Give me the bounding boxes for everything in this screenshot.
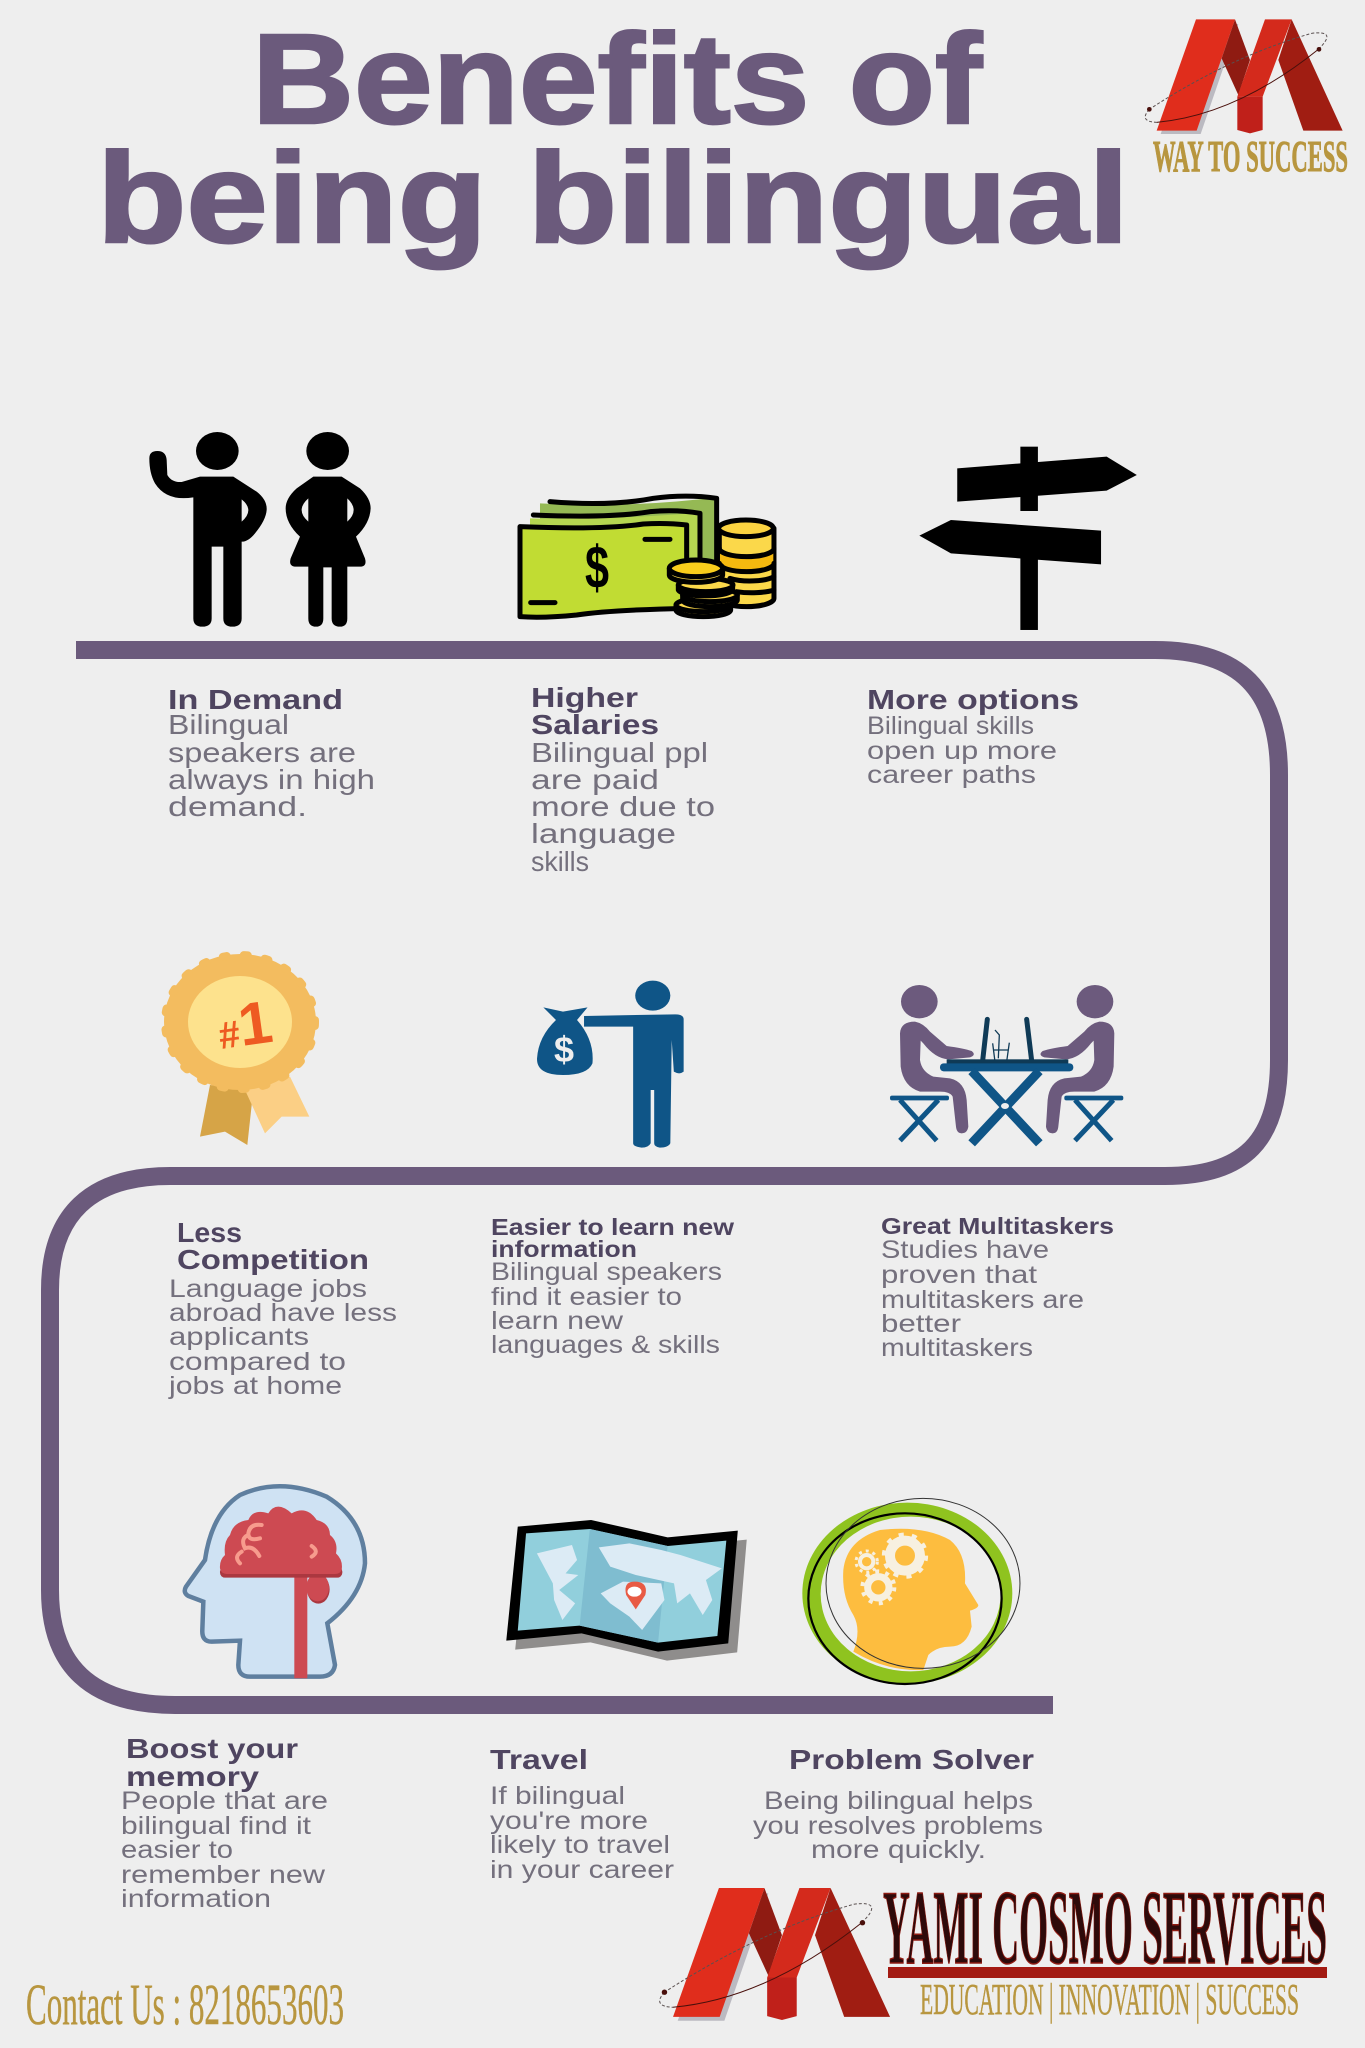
logo: way to success (1145, 19, 1348, 181)
text block: Travel (490, 1744, 674, 1884)
icon: head with brain (185, 1486, 365, 1678)
text block: Boost your memory (121, 1733, 328, 1913)
text block: Less Competition (168, 1217, 397, 1400)
text block: Boost your memory: People that are (121, 1787, 328, 1815)
text block: Easier to learn new information: learn new (491, 1307, 624, 1335)
text block: In Demand: demand. (168, 791, 307, 822)
text block: More options: Bilingual skills (867, 712, 1034, 740)
text block: Great Multitaskers: Studies have (881, 1236, 1049, 1264)
text block: Easier to learn new information: Easier to learn new (491, 1214, 734, 1240)
text block: Higher Salaries: Salaries (531, 709, 659, 740)
text block: Great Multitaskers: multitaskers (881, 1334, 1033, 1362)
text block: In Demand (168, 684, 375, 822)
text block: Great Multitaskers: Great Multitaskers (881, 1213, 1114, 1239)
text block: Less Competition: jobs at home (168, 1372, 342, 1400)
icon: money and coins (520, 496, 774, 617)
icon: number one medal: #1 (213, 988, 276, 1062)
text block: Great Multitaskers: better (881, 1310, 961, 1338)
text block: Easier to learn new information: Bilingual speakers (491, 1258, 722, 1286)
text block: In Demand: In Demand (168, 684, 343, 715)
text block: In Demand: always in high (168, 764, 375, 795)
text block: Problem Solver: more quickly. (811, 1836, 986, 1864)
title: being bilingual (97, 127, 1129, 270)
text block: Boost your memory: memory (126, 1761, 260, 1792)
icon: signpost (919, 447, 1137, 630)
text block: More options: career paths (867, 761, 1036, 789)
text block: Boost your memory: bilingual find it (121, 1812, 311, 1840)
text block: Great Multitaskers: multitaskers are (881, 1286, 1084, 1314)
text block: Easier to learn new information (491, 1214, 734, 1359)
text block: Travel: likely to travel (490, 1831, 670, 1859)
icon: head with gears in a green ring (802, 1498, 1020, 1684)
text block: Boost your memory: Boost your (126, 1733, 298, 1764)
text block: Higher Salaries: more due to (531, 791, 715, 822)
text block: Travel: Travel (490, 1744, 588, 1775)
text block: Problem Solver: you resolves problems (753, 1812, 1043, 1840)
icon: number one medal (164, 954, 316, 1145)
text block: Less Competition: Less (177, 1217, 242, 1248)
text block: Boost your memory: easier to (121, 1836, 233, 1864)
icon: two people (149, 432, 371, 627)
text block: Higher Salaries: are paid (531, 764, 659, 795)
icon: world map (506, 1520, 747, 1661)
text block: Higher Salaries: Higher (531, 682, 638, 713)
icon: two people at a table (890, 985, 1123, 1143)
text block: Higher Salaries: skills (531, 846, 589, 877)
text block: Travel: in your career (490, 1856, 674, 1884)
text block: Less Competition: Language jobs (169, 1275, 367, 1303)
text block: Great Multitaskers (881, 1213, 1114, 1362)
text block: More options: More options (867, 684, 1079, 715)
text block: Higher Salaries (531, 682, 715, 877)
text block: Boost your memory: remember new (121, 1861, 326, 1889)
icon: man holding money bag (537, 981, 684, 1148)
text block: Great Multitaskers: proven that (881, 1261, 1037, 1289)
text block: More options: open up more (867, 737, 1057, 765)
text block: Less Competition: abroad have less (169, 1299, 397, 1327)
winding purple path (50, 650, 1279, 1705)
text block: Problem Solver: Problem Solver (789, 1744, 1034, 1775)
text block: Higher Salaries: language (531, 818, 676, 849)
text block: Easier to learn new information: information (491, 1236, 637, 1262)
text block: Less Competition: Competition (177, 1244, 369, 1275)
icon: money and coins: $ (585, 534, 609, 601)
logo: Yami Cosmo Services (660, 1869, 1327, 2024)
text block: Travel: you're more (490, 1807, 648, 1835)
text block: Boost your memory: information (121, 1885, 271, 1913)
text block: Easier to learn new information: languages & skills (491, 1331, 720, 1359)
title (97, 8, 1129, 270)
text block: Travel: If bilingual (490, 1782, 625, 1810)
text block: Higher Salaries: Bilingual ppl (531, 737, 708, 768)
text block: More options (867, 684, 1079, 789)
text block: Less Competition: applicants (169, 1323, 309, 1351)
text block: Problem Solver: Being bilingual helps (764, 1787, 1033, 1815)
text block: Less Competition: compared to (169, 1348, 346, 1376)
title: Benefits of (252, 8, 982, 151)
text block: Easier to learn new information: find it easier to (491, 1283, 682, 1311)
text block: In Demand: Bilingual (168, 709, 289, 740)
contact phone number: Contact Us : 8218653603 (26, 1972, 344, 2037)
text block: Problem Solver (753, 1744, 1043, 1864)
icon: man holding money bag: $ (554, 1029, 574, 1070)
text block: In Demand: speakers are (168, 737, 356, 768)
